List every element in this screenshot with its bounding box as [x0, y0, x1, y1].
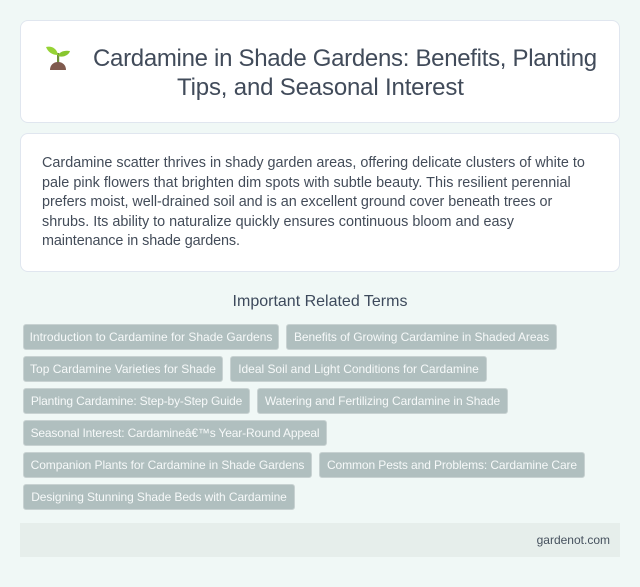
- title: Cardamine in Shade Gardens: Benefits, Planting: [93, 45, 597, 72]
- panel: title header: [20, 20, 620, 123]
- tag: Top Cardamine Varieties for Shade: [30, 362, 216, 376]
- tag: Ideal Soil and Light Conditions for Cardamine: [238, 362, 479, 376]
- tag: [23, 420, 327, 446]
- tag: [23, 324, 279, 350]
- panel: description: [20, 133, 620, 272]
- text block: description: pale pink flowers that brighten dim spots with subtle beauty. This resilient perennial: [42, 175, 571, 191]
- tag: [257, 388, 508, 414]
- text block: description: shrubs. Its ability to naturalize quickly ensures continuous bloom and easy: [42, 214, 514, 230]
- tag: [23, 388, 250, 414]
- icon: seedling: [46, 46, 70, 70]
- source credit: gardenot.com: [537, 533, 610, 547]
- text block: description: prefers moist, well-drained soil and is an excellent ground cover beneath trees or: [42, 194, 552, 210]
- tag: [23, 356, 223, 382]
- tag: [23, 484, 295, 510]
- tag: Planting Cardamine: Step-by-Step Guide: [31, 394, 242, 408]
- tag: [23, 452, 312, 478]
- tag: Watering and Fertilizing Cardamine in Shade: [265, 394, 500, 408]
- tag: Designing Stunning Shade Beds with Cardamine: [31, 490, 287, 504]
- tag: [230, 356, 487, 382]
- text block: description: Cardamine scatter thrives in shady garden areas, offering delicate clusters of white to: [42, 155, 585, 171]
- title: [93, 45, 597, 101]
- text block: description: maintenance in shade gardens.: [42, 233, 240, 249]
- tag: Benefits of Growing Cardamine in Shaded Areas: [294, 330, 549, 344]
- panel: related term tags: [23, 324, 585, 510]
- tag: [286, 324, 557, 350]
- tag: Seasonal Interest: Cardamineâ€™s Year-Round Appeal: [31, 426, 319, 440]
- tag: Introduction to Cardamine for Shade Gardens: [30, 330, 272, 344]
- tag: Companion Plants for Cardamine in Shade Gardens: [31, 458, 304, 472]
- text block: description: [42, 155, 585, 249]
- title: Tips, and Seasonal Interest: [177, 74, 464, 101]
- footer: [20, 523, 620, 557]
- tag: [319, 452, 585, 478]
- heading: related terms: Important Related Terms: [233, 293, 407, 310]
- tag: Common Pests and Problems: Cardamine Care: [327, 458, 577, 472]
